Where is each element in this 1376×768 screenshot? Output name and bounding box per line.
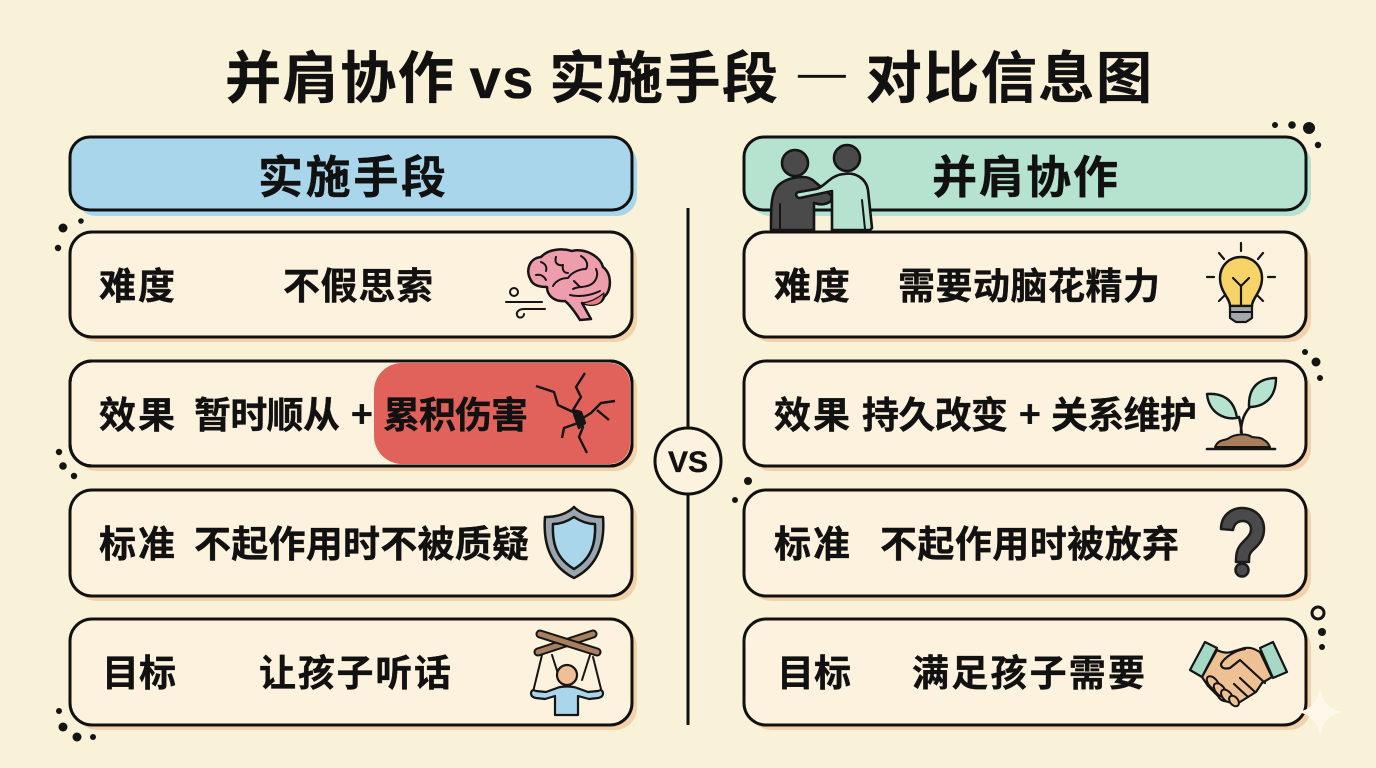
row: 难度 需要动脑花精力: 需要动脑花精力	[898, 256, 1160, 310]
row: 目标 满足孩子需要: 目标	[777, 643, 851, 697]
row: 效果 暂时顺从 + 累积伤害: 效果	[99, 385, 175, 439]
row: 标准 不起作用时被放弃: 不起作用时被放弃	[880, 514, 1179, 568]
row: 效果 持久改变 + 关系维护: +	[1019, 385, 1041, 439]
panel: 并肩协作 column	[744, 137, 1311, 730]
row: 难度 不假思索	[70, 232, 637, 342]
row: 标准 不起作用时被放弃	[744, 490, 1311, 601]
icon: sprout	[1207, 378, 1276, 449]
heading: 实施手段: 实施手段	[258, 141, 446, 206]
panel: 实施手段 column	[70, 137, 637, 730]
icon: light bulb	[1207, 243, 1275, 322]
row: 效果 持久改变 + 关系维护: 关系维护	[1051, 385, 1197, 439]
icon: question mark	[1221, 508, 1264, 576]
row: 标准 不起作用时不被质疑: 标准	[99, 514, 175, 568]
decorative dots	[55, 121, 1326, 741]
row: 难度 不假思索: 不假思索	[283, 256, 433, 310]
title: 并肩协作 vs 实施手段 — 对比信息图	[225, 34, 1152, 115]
row: 难度 需要动脑花精力: 难度	[774, 256, 850, 310]
heading: 并肩协作: 并肩协作	[932, 141, 1118, 206]
row: 标准 不起作用时不被质疑: 不起作用时不被质疑	[194, 514, 529, 568]
row: 效果 持久改变 + 关系维护: 效果	[774, 385, 850, 439]
row: 目标 满足孩子需要: 满足孩子需要	[912, 643, 1145, 697]
row: 难度 不假思索: 难度	[99, 256, 175, 310]
row: 效果 持久改变 + 关系维护	[744, 361, 1311, 471]
row: 效果 持久改变 + 关系维护: 持久改变	[862, 385, 1008, 439]
icon: marionette puppet	[531, 634, 603, 715]
row: 标准 不起作用时被放弃: 标准	[774, 514, 850, 568]
row: 目标 满足孩子需要	[744, 619, 1311, 730]
row: 目标 让孩子听话: 让孩子听话	[259, 643, 451, 697]
row: 效果 暂时顺从 + 累积伤害: +	[351, 385, 373, 439]
row: 难度 需要动脑花精力	[744, 232, 1311, 342]
highlight: 累积伤害	[374, 363, 630, 464]
heading: 并肩协作	[744, 137, 1311, 216]
illustration: two people shoulder to shoulder	[771, 145, 872, 230]
icon: crack	[536, 373, 615, 453]
row: 效果 暂时顺从 + 累积伤害: 累积伤害	[383, 385, 528, 439]
row: 目标 让孩子听话	[70, 619, 637, 730]
icon: handshake	[1190, 642, 1287, 708]
sparkle watermark	[1298, 688, 1342, 736]
icon: brain with wind	[506, 249, 610, 320]
row: 目标 让孩子听话: 目标	[102, 643, 176, 697]
heading: 实施手段	[70, 137, 637, 216]
row: 效果 暂时顺从 + 累积伤害: 暂时顺从	[194, 385, 340, 439]
divider with VS badge	[655, 208, 721, 725]
row: 标准 不起作用时不被质疑	[70, 490, 637, 601]
divider with VS badge: VS	[668, 446, 708, 479]
row: 效果 暂时顺从 + 累积伤害	[70, 361, 637, 471]
icon: shield	[545, 507, 603, 578]
